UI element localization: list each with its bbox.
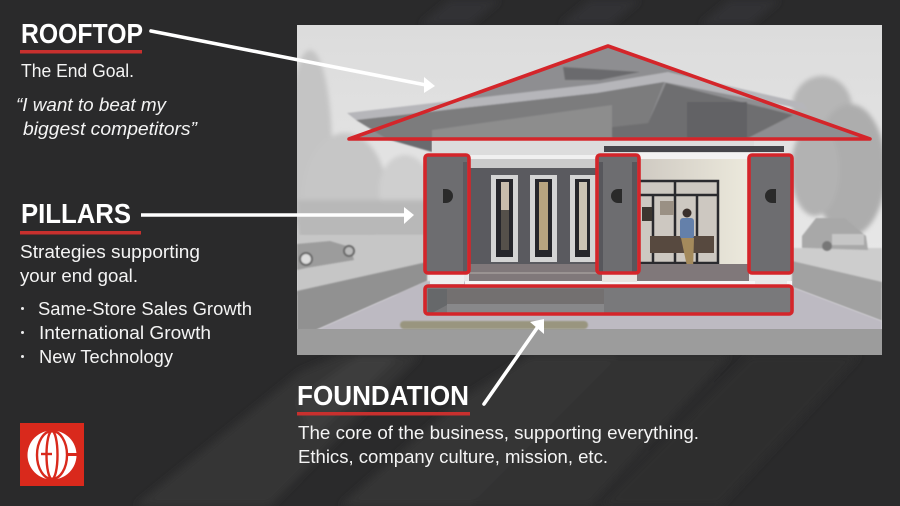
windows (491, 175, 597, 262)
pillars fill (425, 155, 792, 273)
foundation arrow (484, 319, 544, 404)
pillars underline (20, 231, 141, 234)
lawn (297, 262, 427, 331)
rooftop quote (16, 94, 198, 139)
plants (400, 321, 588, 329)
foundation heading: FOUNDATION (297, 380, 469, 411)
foundation steps (425, 287, 792, 314)
trees (297, 50, 882, 236)
recessed entry (639, 159, 749, 270)
right pillar outline (749, 155, 792, 273)
pillars bullet list: International Growth (39, 322, 211, 343)
rooftop underline (20, 50, 142, 54)
left pillar outline (425, 155, 469, 273)
rooftop arrow (151, 31, 435, 93)
pillars bullet list: Same-Store Sales Growth (38, 298, 252, 319)
rooftop heading: ROOFTOP (21, 18, 143, 49)
rooftop description: The End Goal. (21, 60, 134, 81)
logo (20, 423, 84, 486)
right parked car (802, 218, 868, 251)
pillars bullet list: New Technology (39, 346, 174, 367)
pillars description: Strategies supporting (20, 241, 200, 262)
roof outline (349, 46, 870, 139)
pillars heading: PILLARS (21, 198, 131, 229)
rooftop quote: biggest competitors” (23, 118, 198, 139)
rooftop text block (16, 18, 198, 139)
foundation description: The core of the business, supporting everything. (298, 422, 699, 443)
pillars description (20, 241, 200, 286)
person (680, 208, 694, 264)
foundation outline (425, 286, 792, 314)
foundation description (298, 422, 699, 467)
wall (469, 168, 597, 268)
street (297, 235, 427, 295)
ceiling and beam (432, 141, 433, 152)
pillars text block (20, 198, 252, 367)
rooftop quote: “I want to beat my (16, 94, 168, 115)
pillars bullet list (21, 298, 252, 367)
floor (469, 264, 749, 281)
foundation description: Ethics, company culture, mission, etc. (298, 446, 608, 467)
house photo (288, 25, 886, 355)
left parked car (297, 241, 354, 270)
sidewalk (297, 281, 882, 331)
center pillar outline (597, 155, 639, 273)
sky (297, 25, 882, 355)
roof (347, 46, 870, 152)
pillars description: your end goal. (20, 265, 138, 286)
foundation underline (297, 412, 470, 416)
foreground grass (297, 329, 882, 355)
red outlines (349, 46, 870, 314)
pillars arrow (141, 207, 414, 224)
foundation text block (297, 380, 699, 467)
